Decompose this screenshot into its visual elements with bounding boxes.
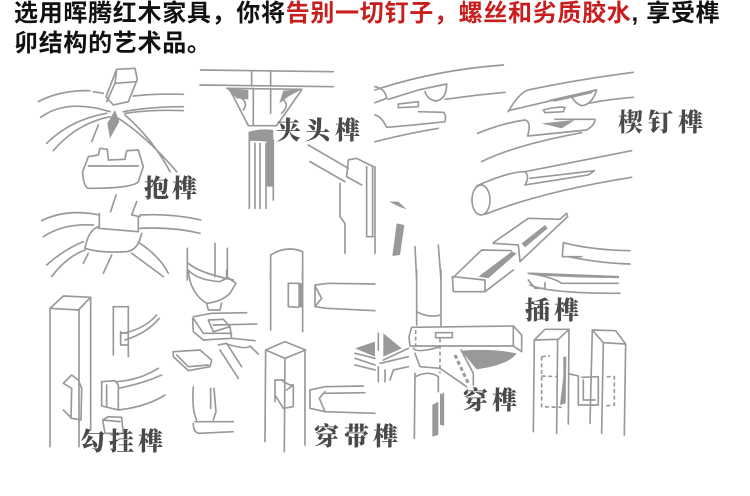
diagram: curved leg joint [173, 270, 258, 433]
label: bridle tenon: 夹 [276, 111, 301, 147]
label: inserted tenon: 榫 [554, 291, 579, 327]
diagram: wedged dowel tenon [375, 65, 633, 215]
label: wedged dowel tenon: 钉 [648, 103, 673, 139]
diagram: bridle tenon [200, 70, 373, 253]
label: through tenon: 穿 [463, 381, 488, 417]
label: bridle tenon: 头 [305, 111, 333, 147]
label: inserted tenon: 插 [525, 291, 550, 327]
label: inserted tenon [525, 291, 579, 327]
label: wedged dowel tenon: 楔 [618, 103, 643, 139]
label: embracing tenon: 抱 [144, 169, 169, 205]
diagram: sliding dovetail post and bar [265, 270, 375, 452]
heading: 卯结构的艺术品。 [14, 30, 212, 57]
diagram: embracing tenon [38, 68, 201, 277]
label: wedged dowel tenon [618, 103, 703, 139]
label: through tenon: 榫 [492, 381, 517, 417]
heading [14, 0, 720, 57]
label: embracing tenon: 榫 [172, 169, 197, 205]
label: banded through tenon [314, 417, 398, 453]
label: banded through tenon: 带 [343, 417, 369, 453]
label: embracing tenon [144, 169, 197, 205]
diagram: through tenon [355, 270, 522, 438]
label: banded through tenon: 穿 [314, 417, 339, 453]
label: bridle tenon [276, 111, 360, 147]
label: through tenon [463, 381, 517, 417]
diagram: corner post pair [533, 329, 626, 435]
diagram: inserted tenon [452, 213, 630, 278]
label: hook tenon: 挂 [109, 422, 134, 458]
label: hook tenon: 勾 [80, 422, 105, 458]
label: hook tenon [80, 422, 163, 458]
label: banded through tenon: 榫 [373, 417, 398, 453]
label: bridle tenon: 榫 [335, 111, 360, 147]
diagram: hook tenon [50, 296, 165, 447]
label: wedged dowel tenon: 榫 [678, 103, 703, 139]
heading: 选用晖腾红木家具，你将告别一切钉子，螺丝和劣质胶水, 享受榫 [14, 0, 720, 27]
label: hook tenon: 榫 [138, 422, 163, 458]
